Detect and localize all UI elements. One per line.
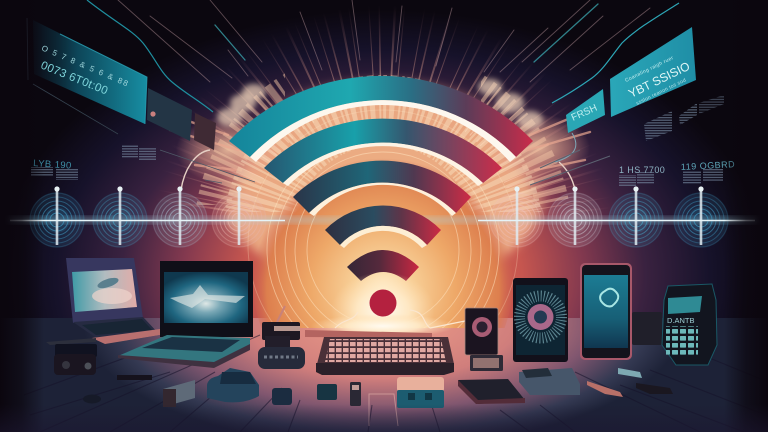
small teal panel: FRSH	[570, 103, 599, 124]
wifi symbol	[229, 76, 533, 348]
right captions and data lines: 1 HS 7700	[619, 165, 665, 175]
right captions and data lines	[530, 150, 735, 187]
small dark panel	[147, 88, 192, 141]
dark box behind terminal	[632, 312, 662, 345]
pebble	[83, 394, 101, 404]
arc 5	[347, 250, 419, 281]
arc 1	[229, 76, 533, 157]
white band 1	[250, 100, 516, 162]
router box	[397, 377, 444, 408]
arc 3	[293, 161, 471, 213]
white band 4	[340, 226, 427, 248]
arc 4	[325, 206, 441, 245]
white band 3	[309, 183, 456, 216]
large teal panel: O 5 7 8 & 5 6 & 88	[40, 44, 131, 89]
teal data cables	[87, 0, 679, 190]
screen	[164, 272, 248, 323]
right captions and data lines: 119 OGBRD	[681, 159, 735, 172]
large teal panel	[610, 27, 696, 117]
small floor items left	[83, 368, 292, 407]
left display panels	[27, 18, 216, 150]
data stripes	[644, 95, 724, 141]
center dot	[370, 290, 396, 316]
tablet	[513, 278, 568, 362]
small teal panel	[566, 89, 605, 133]
heart logo	[600, 289, 618, 306]
arc 2	[264, 119, 502, 183]
floor perspective lines	[24, 335, 768, 432]
white band 2	[283, 143, 483, 186]
concentric signal rings	[248, 110, 518, 328]
white frame	[369, 394, 398, 426]
antenna emitters left	[30, 186, 266, 247]
toy car left	[46, 338, 97, 375]
brown panel	[194, 113, 216, 150]
glow band	[8, 217, 758, 223]
light burst behind wifi symbol	[170, 13, 597, 260]
router	[519, 368, 580, 395]
usb device	[350, 382, 361, 406]
cube	[163, 380, 195, 407]
base	[118, 335, 250, 367]
long thin rays	[118, 0, 650, 170]
usb stick	[636, 383, 673, 394]
large teal panel: YBT SSISIO	[626, 59, 692, 101]
keyboard	[305, 330, 454, 375]
lid	[160, 261, 253, 337]
left caption and data lines: LYB 190	[33, 158, 72, 172]
base	[73, 317, 160, 344]
table floor	[0, 318, 768, 432]
pink stick	[587, 381, 623, 397]
payment terminal	[662, 284, 717, 365]
lid	[66, 258, 143, 323]
small chip	[317, 384, 337, 400]
laptop left	[66, 258, 160, 344]
large teal panel: 0073 6T0t:00	[39, 60, 110, 98]
teal memory stick	[618, 368, 642, 378]
payment terminal: D.ANTB	[667, 316, 695, 325]
large teal panel	[33, 20, 147, 124]
screen	[72, 269, 137, 312]
flat bar	[117, 375, 152, 380]
floor items center	[317, 377, 525, 426]
tablet flat	[458, 379, 525, 404]
laptop center	[118, 261, 253, 368]
antenna emitters right	[490, 186, 728, 247]
left caption and data lines	[31, 145, 255, 183]
central glow	[311, 272, 470, 348]
signal wave row	[8, 186, 758, 247]
cloud puffs	[217, 79, 543, 129]
horizontal line	[10, 220, 755, 222]
right display panels	[566, 27, 724, 141]
small block	[272, 388, 292, 405]
blue toy car	[207, 368, 259, 402]
large teal panel: Coanaling raigh ruer	[624, 55, 675, 84]
smartphone	[580, 263, 632, 360]
floor items right	[519, 368, 673, 397]
small phone on stand	[465, 308, 503, 371]
large teal panel: ssslon reanon tos sod	[635, 77, 687, 107]
robot camera	[258, 306, 305, 369]
